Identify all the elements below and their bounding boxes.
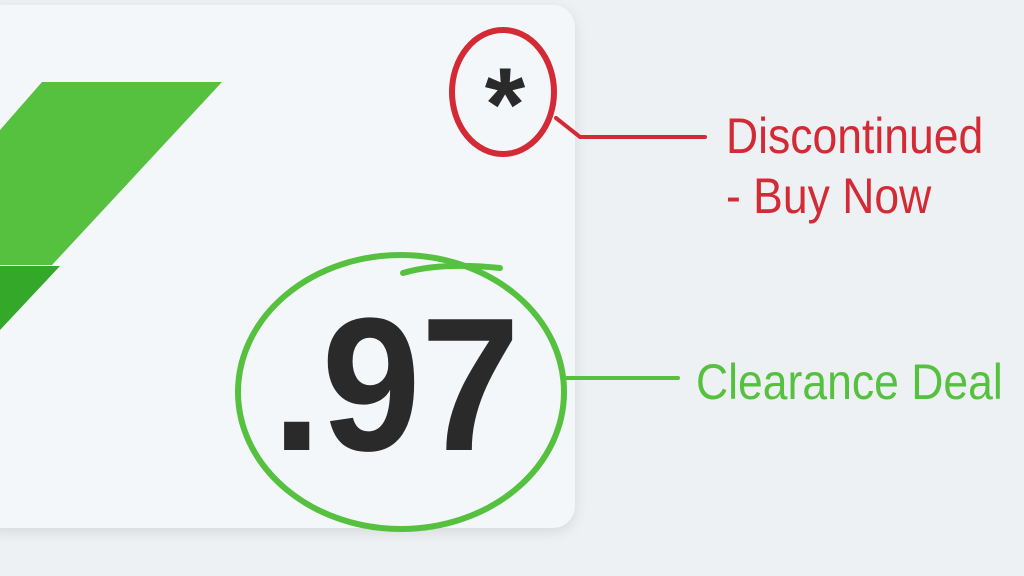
red connector [556,118,705,137]
card panel [0,5,575,528]
label: discontinued: Discontinued [726,108,983,164]
label: discontinued: - Buy Now [726,168,931,224]
green stripe dark [0,266,60,330]
green stripe top [0,82,222,265]
label: clearance deal: Clearance Deal [696,354,1003,410]
green connector [565,376,678,380]
asterisk: * [485,47,526,163]
green circle around .97 [238,255,564,529]
label: discontinued [726,108,983,224]
red circle around asterisk [452,30,554,154]
price .97: .97 [272,279,520,491]
